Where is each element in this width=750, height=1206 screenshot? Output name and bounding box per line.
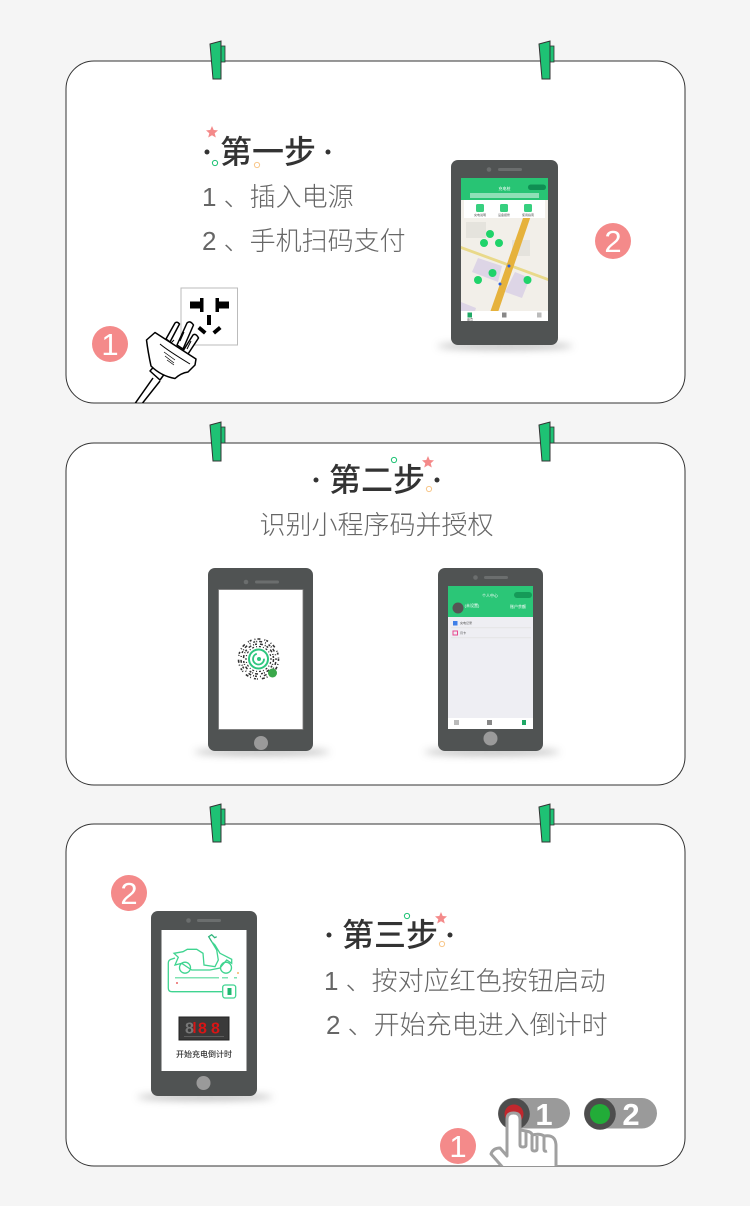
map: 充电桩 [498, 185, 510, 191]
icon: button 2: 2 [622, 1097, 640, 1132]
icon: left clip [210, 804, 225, 842]
icon: phone with personal center: 个人中心 [482, 592, 498, 598]
icon: button 1: 1 [535, 1097, 553, 1132]
heading: step one [204, 126, 330, 170]
icon: phone with QR code [194, 568, 330, 756]
seven-segment display: 8 [198, 1020, 207, 1038]
icon: right clip [539, 41, 554, 79]
icon: left clip [210, 41, 225, 79]
text: instructions: 1 、按对应红色按钮启动 [324, 966, 606, 996]
heading: step three [326, 912, 452, 953]
badge: 2: 2 [120, 876, 138, 911]
map: 充电说明 [474, 212, 486, 217]
icon: phone with charging screen: 开始充电倒计时 [176, 1049, 232, 1059]
icon: phone with charging screen [137, 911, 273, 1100]
map [461, 178, 548, 322]
icon: plug and cable [134, 322, 198, 405]
heading: step two: 第二步 [329, 462, 425, 498]
icon: left clip [210, 422, 225, 461]
icon: phone with personal center: 充电记录 [460, 620, 472, 625]
text: instructions: 2 、手机扫码支付 [202, 226, 406, 256]
icon: phone with personal center [424, 568, 560, 756]
panel: step three [66, 804, 685, 1170]
icon: phone with personal center: 账户余额 [510, 603, 526, 609]
icon: phone with map [437, 160, 573, 350]
badge: 1: 1 [101, 327, 119, 362]
heading: step one: 第一步 [220, 134, 316, 170]
heading: step three: 第三步 [342, 917, 438, 953]
badge: 2: 2 [604, 224, 622, 259]
icon: button 1 [498, 1097, 570, 1132]
scooter drawing [168, 935, 236, 998]
badge: 2 [595, 223, 631, 259]
badge: 2 [111, 875, 147, 911]
text: instructions: 2 、开始充电进入倒计时 [326, 1010, 608, 1040]
text: instructions: 1 、插入电源 [202, 182, 354, 212]
heading: step two [314, 456, 440, 498]
text: scan instruction: 识别小程序码并授权 [260, 510, 494, 540]
panel: step one [66, 41, 685, 405]
QR code [238, 639, 278, 679]
icon: button 2 [584, 1097, 657, 1132]
icon: phone with personal center: 月卡 [460, 630, 466, 635]
badge: 1: 1 [449, 1129, 467, 1164]
icon: phone with personal center: (未设置) [465, 602, 480, 608]
text: instructions [202, 182, 406, 256]
seven-segment display: 8 [185, 1020, 194, 1038]
map: 首页 [467, 316, 473, 322]
panel: step two [66, 422, 685, 785]
seven-segment display: 8 [211, 1020, 220, 1038]
text: instructions [324, 966, 608, 1040]
icon: wall socket [181, 288, 238, 345]
icon: pointing hand [491, 1113, 556, 1170]
map: 使用指南 [522, 212, 534, 217]
icon: right clip [539, 804, 554, 842]
badge: 1 [92, 326, 128, 362]
badge: 1 [440, 1128, 476, 1164]
seven-segment display [179, 1017, 229, 1040]
map: 设备报修 [498, 212, 510, 217]
icon: right clip [539, 422, 554, 461]
